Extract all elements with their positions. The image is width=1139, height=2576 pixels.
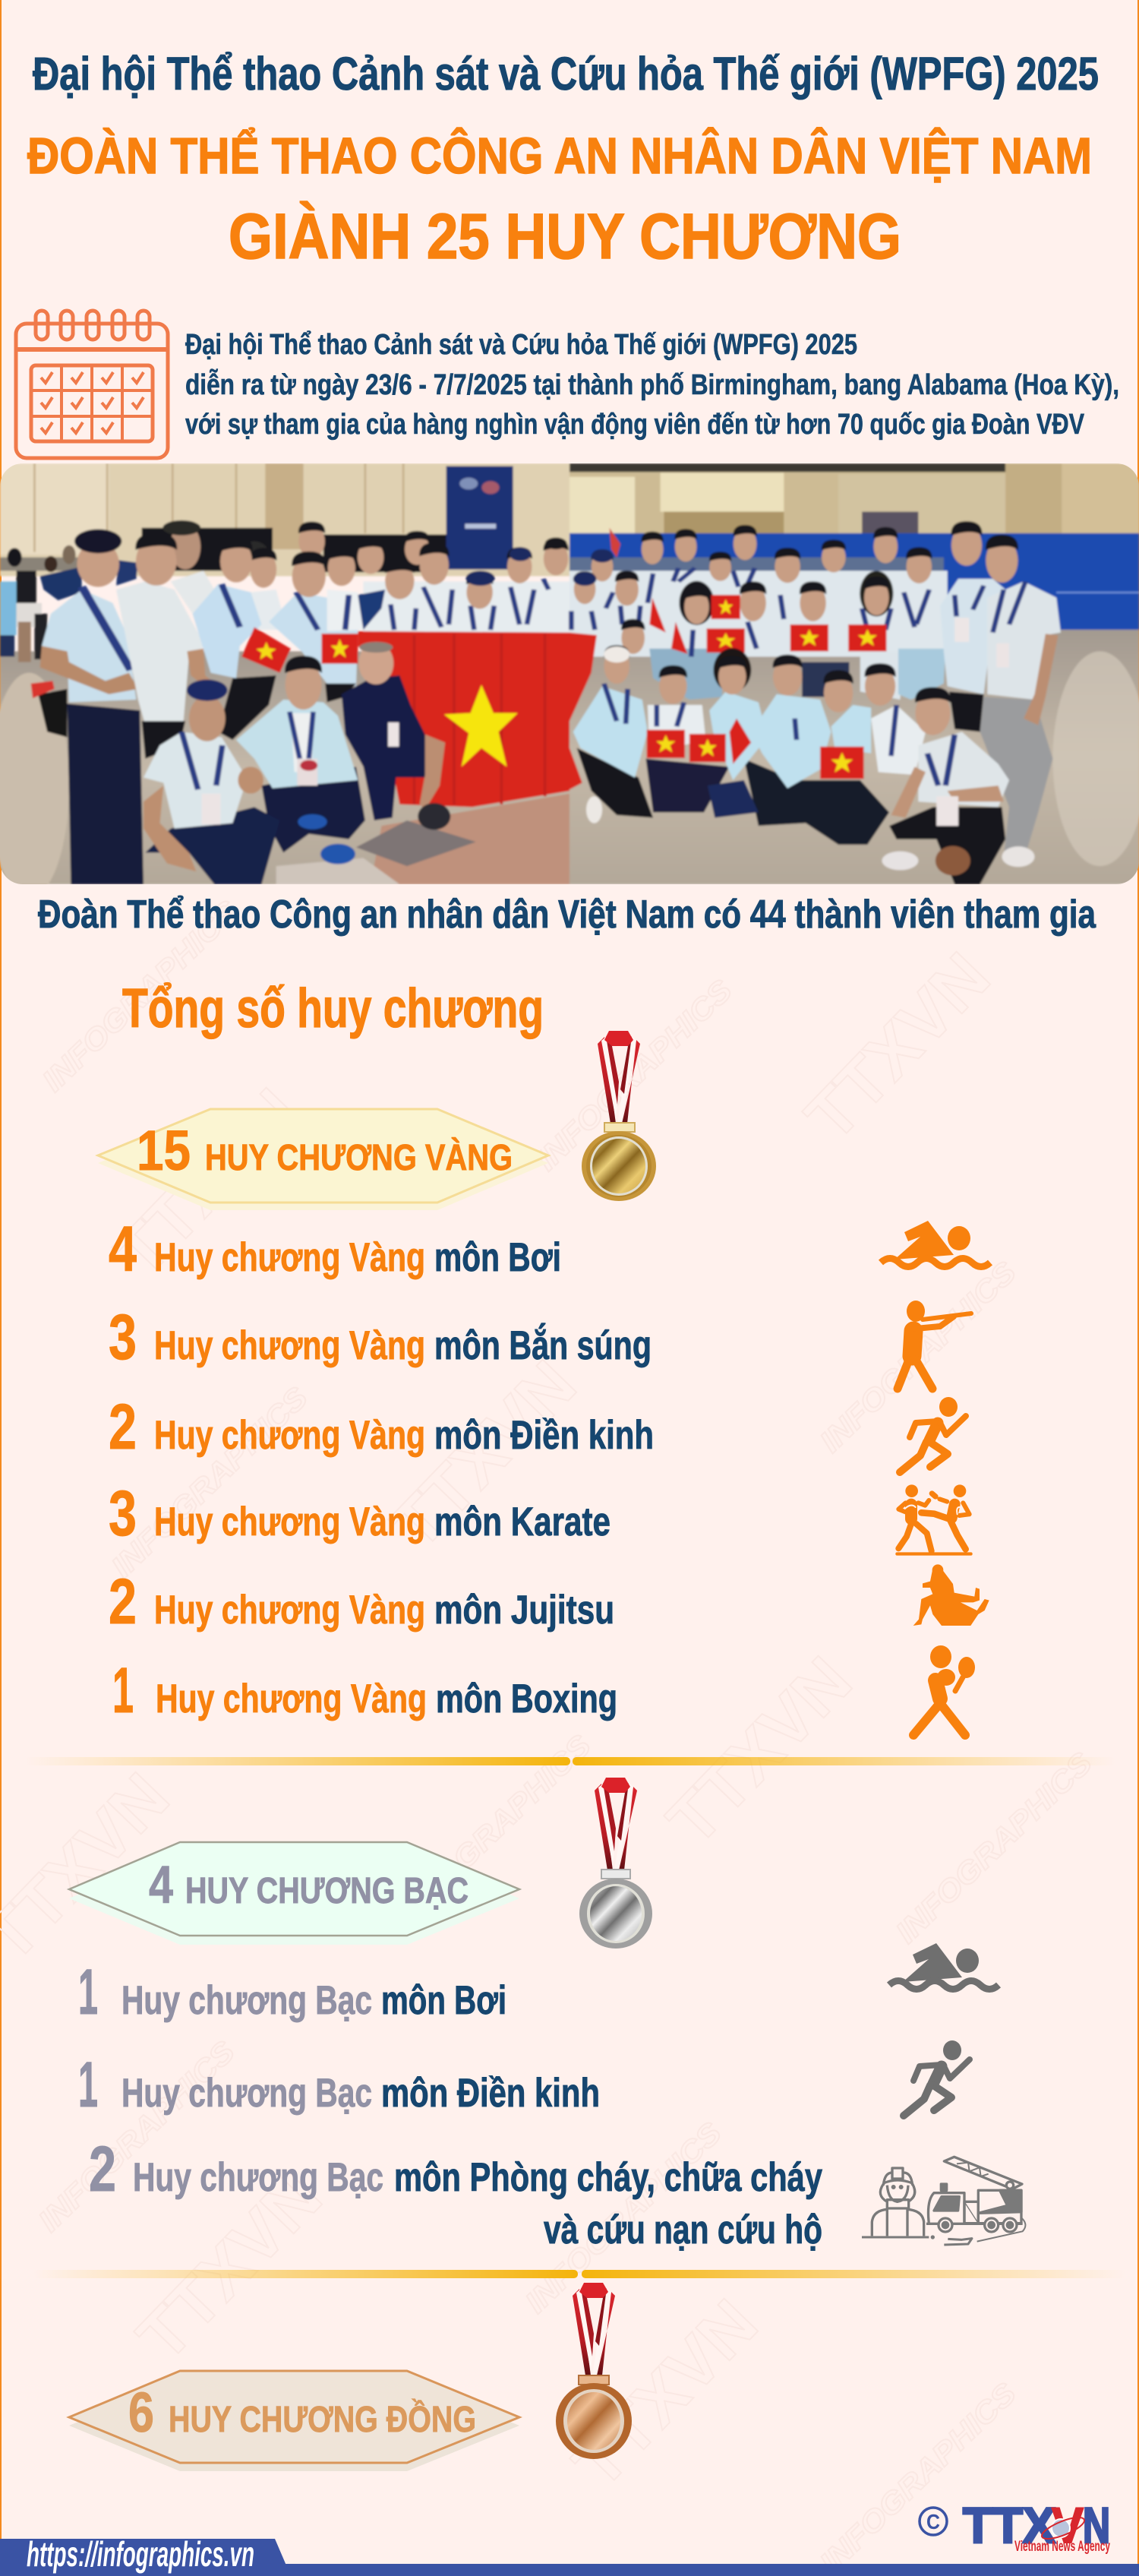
text block: event description (185, 329, 1119, 441)
row: 2 gold athletics: môn Điền kinh (434, 1413, 654, 1458)
row: 3 gold karate (109, 1478, 611, 1549)
row: 1 silver athletics: môn Điền kinh (381, 2071, 600, 2116)
row: 2 gold jujitsu: 2 (109, 1566, 137, 1637)
row: 2 gold athletics: 2 (109, 1391, 137, 1462)
text block: event description: Đại hội Thể thao Cảnh sát và Cứu hỏa Thế giới (WPFG) 2025 (185, 329, 857, 361)
text: TTXVN (791, 939, 1005, 1155)
row: 4 gold swimming: môn Bơi (434, 1235, 561, 1280)
row: 3 gold shooting (109, 1301, 652, 1373)
row: 1 silver athletics: Huy chương Bạc (121, 2071, 372, 2116)
badge: 4 silver medals: 4 (149, 1855, 173, 1914)
logo: TTXVN copyright: V (1052, 2497, 1084, 2553)
text: INFOGRAPHICS (33, 2034, 241, 2238)
row: 3 gold karate: Huy chương Vàng (154, 1500, 425, 1544)
row: 2 gold athletics (109, 1391, 654, 1462)
heading: total medals: Tổng số huy chương (122, 978, 544, 1039)
text: TTXVN (377, 1347, 591, 1563)
row: 4 gold swimming: Huy chương Vàng (154, 1235, 425, 1280)
text: INFOGRAPHICS (389, 1728, 598, 1932)
text: TTXVN (123, 2159, 336, 2375)
photo: delegation group with Vietnamese flag (0, 463, 1139, 899)
row: 4 gold swimming (109, 1213, 561, 1285)
icon: runner grey (904, 2040, 970, 2116)
row: 1 silver swimming: 1 (78, 1956, 98, 2028)
logo: TTXVN copyright: C (926, 2510, 940, 2533)
medal: silver (579, 1778, 652, 1949)
footer: url bar (0, 2534, 1139, 2576)
text: INFOGRAPHICS (36, 894, 245, 1098)
row: 4 gold swimming: 4 (109, 1213, 137, 1285)
row: 2 silver fire fighting and rescue: môn Phòng cháy, chữa cháy (394, 2155, 822, 2200)
row: 1 silver swimming: môn Bơi (381, 1978, 506, 2023)
row: 1 gold boxing (112, 1655, 617, 1726)
icon: runner (900, 1397, 966, 1472)
icon: karate fighters (895, 1484, 973, 1556)
row: 2 gold jujitsu: Huy chương Vàng (154, 1588, 425, 1633)
row: 2 gold jujitsu (109, 1566, 614, 1637)
logo: TTXVN copyright (920, 2497, 1110, 2555)
row: 2 silver fire fighting and rescue (89, 2133, 822, 2252)
row: 3 gold karate: 3 (109, 1478, 137, 1549)
row: 1 silver athletics (78, 2049, 600, 2120)
row: 1 silver swimming: Huy chương Bạc (121, 1978, 372, 2023)
badge: 6 bronze medals (69, 2371, 519, 2471)
badge: 15 gold medals: 15 (137, 1119, 191, 1182)
badge: 15 gold medals (98, 1109, 548, 1210)
badge: 4 silver medals: HUY CHƯƠNG BẠC (185, 1871, 469, 1911)
icon: calendar (16, 311, 168, 458)
row: 3 gold shooting: môn Bắn súng (434, 1323, 652, 1368)
icon: boxer (913, 1645, 975, 1735)
text: TTXVN (559, 2286, 772, 2502)
row: 1 silver swimming (78, 1956, 506, 2028)
row: 1 silver athletics: 1 (78, 2049, 98, 2120)
text: TTXVN (101, 1075, 314, 1291)
footer: url bar: https://infographics.vn (27, 2534, 254, 2574)
text: INFOGRAPHICS (814, 1255, 1023, 1459)
text: INFOGRAPHICS (530, 973, 739, 1177)
medal: gold (582, 1031, 656, 1201)
row: 3 gold shooting: 3 (109, 1301, 137, 1373)
logo: TTXVN copyright: N (1083, 2497, 1110, 2553)
text: INFOGRAPHICS (890, 1746, 1099, 1949)
row: 3 gold karate: môn Karate (434, 1500, 611, 1544)
row: 2 silver fire fighting and rescue: và cứu nạn cứu hộ (544, 2208, 822, 2252)
badge: 4 silver medals (69, 1842, 519, 1945)
row: 1 gold boxing: Huy chương Vàng (156, 1677, 427, 1721)
row: 2 silver fire fighting and rescue: Huy chương Bạc (133, 2155, 383, 2200)
divider (25, 1757, 1115, 1765)
title: 25 medals headline: GIÀNH 25 HUY CHƯƠNG (229, 201, 901, 272)
row: 1 gold boxing: môn Boxing (436, 1677, 617, 1721)
icon: jujitsu (913, 1564, 989, 1626)
icon: swimmer (881, 1221, 990, 1267)
row: 3 gold shooting: Huy chương Vàng (154, 1323, 425, 1368)
logo: TTXVN copyright: TTX (963, 2497, 1055, 2553)
row: 2 gold athletics: Huy chương Vàng (154, 1413, 425, 1458)
divider (33, 2270, 1126, 2278)
icon: swimmer grey (889, 1943, 999, 1989)
text: INFOGRAPHICS (519, 2116, 728, 2319)
row: 2 gold jujitsu: môn Jujitsu (434, 1588, 614, 1633)
icon: firefighter and fire truck (862, 2157, 1025, 2245)
icon: shooter (898, 1301, 971, 1389)
text: TTXVN (653, 1643, 866, 1860)
badge: 15 gold medals: HUY CHƯƠNG VÀNG (205, 1137, 513, 1178)
row: 1 gold boxing: 1 (112, 1655, 134, 1726)
medal: bronze (556, 2283, 632, 2459)
row: 2 silver fire fighting and rescue: 2 (89, 2133, 116, 2205)
text: INFOGRAPHICS (106, 1380, 314, 1584)
badge: 6 bronze medals: 6 (128, 2381, 154, 2444)
badge: 6 bronze medals: HUY CHƯƠNG ĐỒNG (169, 2398, 476, 2440)
text: INFOGRAPHICS (814, 2376, 1023, 2576)
